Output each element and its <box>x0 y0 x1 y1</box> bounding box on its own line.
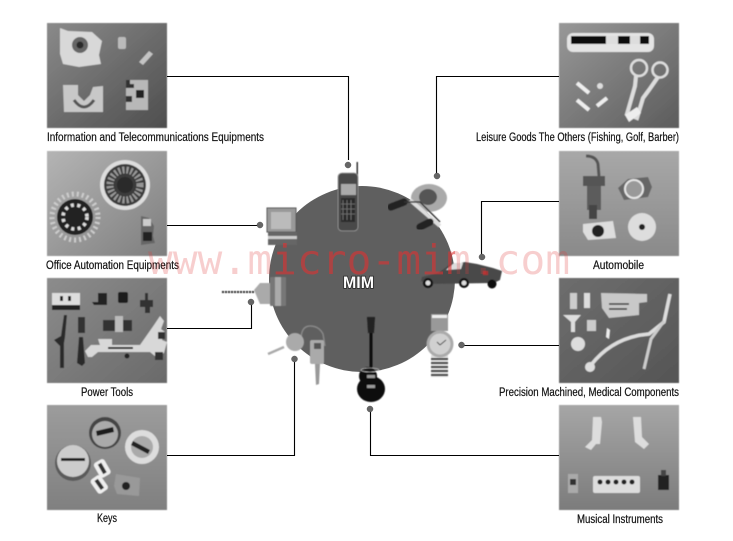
connector: office to monitor <box>167 222 263 228</box>
panel: automobile <box>559 151 679 272</box>
icon: guitar <box>357 317 385 402</box>
label: Precision Machined, Medical Components <box>499 387 679 399</box>
photo: automobile parts <box>559 151 679 256</box>
icon: phone <box>338 162 358 231</box>
photo: stator parts <box>47 151 167 256</box>
connector: telecom to phone <box>167 76 351 168</box>
label: Power Tools <box>81 387 133 399</box>
connector: automobile to car <box>479 202 559 260</box>
label: Automobile <box>593 260 644 272</box>
panel: keys <box>47 405 167 525</box>
icon: fishing reel <box>391 184 447 227</box>
icon: wristwatch <box>426 314 454 377</box>
icon: drill <box>222 277 286 306</box>
panel: power tools <box>47 278 167 399</box>
photo: precision parts <box>559 278 679 383</box>
panel: precision machined, medical components <box>499 278 679 399</box>
label: Keys <box>97 513 117 525</box>
label: Leisure Goods The Others (Fishing, Golf, Barber) <box>476 132 679 144</box>
connector: leisure to reel <box>434 76 559 179</box>
connector: power tools to drill <box>167 299 254 328</box>
photo: instrument parts <box>559 405 679 510</box>
watermark: www.micro-mim.com <box>148 236 570 284</box>
connector: precision to watch <box>458 342 559 348</box>
icon: keys <box>268 326 325 385</box>
panel: leisure goods <box>476 23 679 144</box>
connector: keys to key set <box>167 356 298 456</box>
panel: musical instruments <box>559 405 679 526</box>
label: Office Automation Equipments <box>46 260 179 272</box>
connector: musical to guitar <box>367 406 559 456</box>
photo: telecom parts <box>47 23 167 128</box>
panel: office automation equipments <box>46 151 179 272</box>
photo: leisure parts <box>559 23 679 128</box>
center label: MIM: MIM <box>343 273 374 292</box>
central circle <box>269 186 455 372</box>
photo: power tool parts <box>47 278 167 383</box>
icon: computer monitor <box>267 208 297 245</box>
panel: information and telecommunications equipments <box>47 23 264 144</box>
icon: car <box>421 262 502 288</box>
photo: key parts <box>47 405 167 510</box>
label: Information and Telecommunications Equipments <box>47 132 264 144</box>
label: Musical Instruments <box>577 514 663 526</box>
